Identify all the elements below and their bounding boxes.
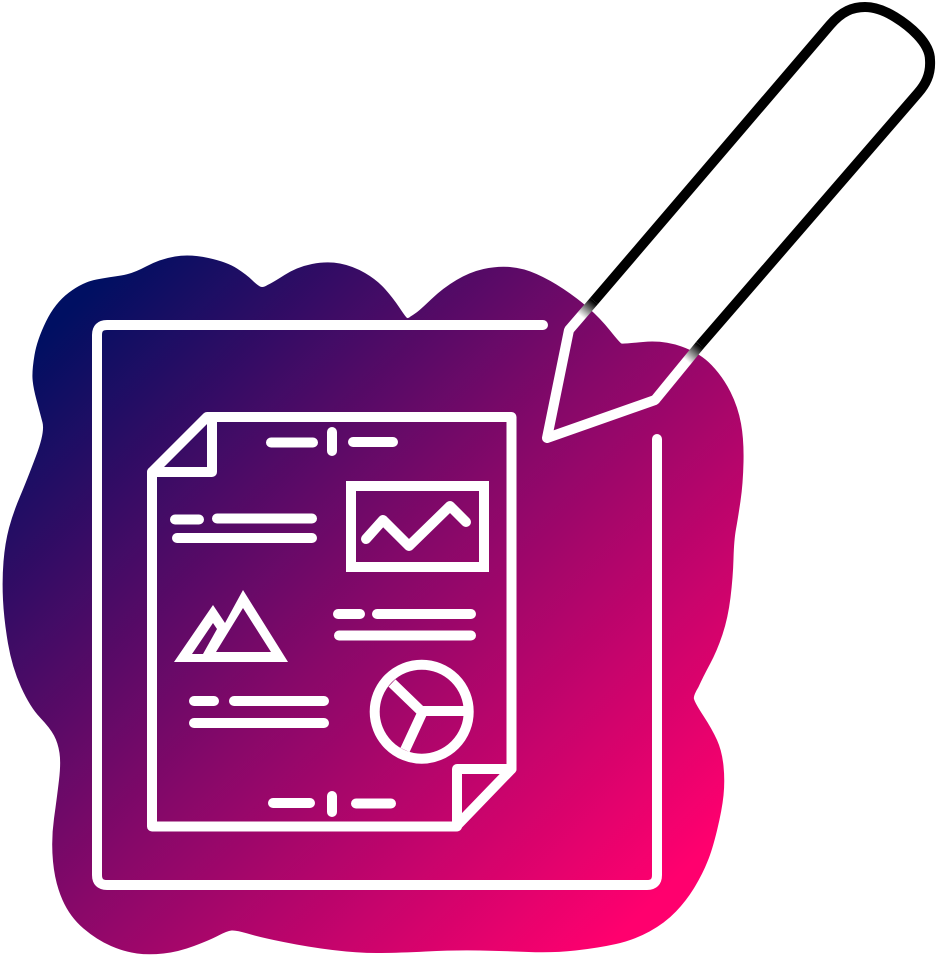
icon: document bbox=[152, 417, 512, 826]
right text block bbox=[338, 614, 471, 636]
left text block bottom bbox=[194, 701, 324, 723]
line chart box bbox=[351, 486, 484, 567]
icon: outer page frame bbox=[97, 325, 657, 885]
gradient blob background bbox=[3, 256, 744, 954]
top folded corner bbox=[152, 417, 212, 472]
bottom folded corner bbox=[457, 769, 512, 826]
pie chart bbox=[375, 665, 469, 759]
header dashes bbox=[271, 432, 393, 451]
document outline bbox=[152, 417, 512, 826]
mountain image icon bbox=[174, 590, 288, 662]
footer dashes bbox=[273, 796, 391, 812]
icon: pen bbox=[547, 7, 930, 438]
left text block top bbox=[175, 518, 312, 538]
